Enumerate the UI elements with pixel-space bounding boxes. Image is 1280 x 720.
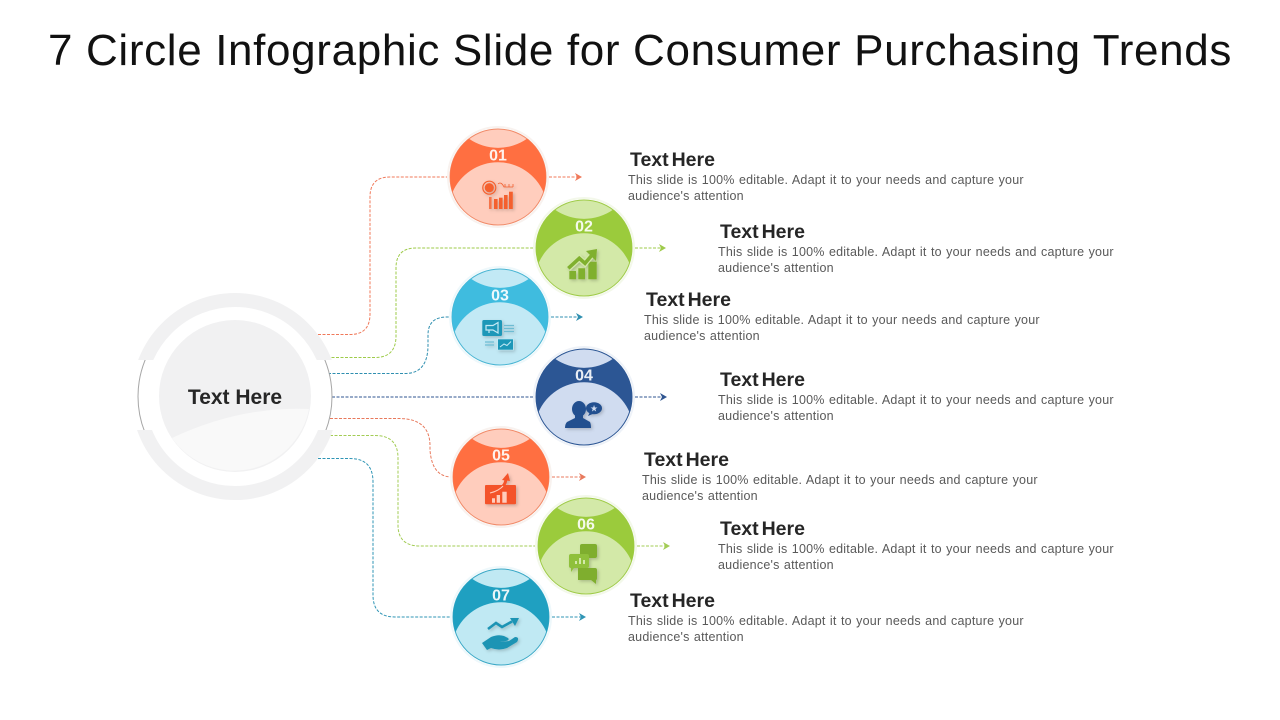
text block 01: audience's attention (628, 189, 744, 203)
icon: rising bars with arrow (568, 249, 597, 279)
text block 02: This slide is 100% editable. Adapt it to your needs and capture your (718, 245, 1114, 259)
title: 7 Circle Infographic Slide for Consumer Purchasing Trends (48, 26, 1232, 75)
text block 01 (628, 149, 1024, 203)
text block 01: Text Here (630, 149, 715, 171)
text block 05: audience's attention (642, 489, 758, 503)
text block 06: This slide is 100% editable. Adapt it to your needs and capture your (718, 542, 1114, 556)
icon: chat bubbles (569, 544, 597, 584)
text block 03 (644, 289, 1040, 343)
text block 03: audience's attention (644, 329, 760, 343)
connector: 01 (318, 173, 582, 334)
text block 04: Text Here (720, 369, 805, 391)
text block 07 (628, 590, 1024, 644)
circle 03 (450, 267, 550, 367)
text block 06 (718, 518, 1114, 572)
text block 07: Text Here (630, 590, 715, 612)
connector: 04 (332, 393, 667, 401)
text block 02: audience's attention (718, 261, 834, 275)
text block 03: Text Here (646, 289, 731, 311)
circle 07: 07 (492, 588, 510, 604)
central hub (138, 300, 332, 494)
text block 07: This slide is 100% editable. Adapt it to your needs and capture your (628, 614, 1024, 628)
text block 04: audience's attention (718, 409, 834, 423)
text block 02: Text Here (720, 221, 805, 243)
icon: megaphone and chart boards (482, 320, 514, 350)
circle 07 (451, 567, 551, 667)
hub label: Text Here (188, 386, 282, 409)
text block 05: Text Here (644, 449, 729, 471)
circle 02 (534, 198, 634, 298)
connector: 06 (330, 436, 670, 550)
connector: 03 (328, 313, 583, 374)
circle 05: 05 (492, 448, 510, 464)
text block 02 (718, 221, 1114, 275)
circle 04 (534, 347, 634, 447)
text block 07: audience's attention (628, 630, 744, 644)
text block 04: This slide is 100% editable. Adapt it to your needs and capture your (718, 393, 1114, 407)
text block 06: audience's attention (718, 558, 834, 572)
icon: presentation board with growth arrow (485, 473, 516, 504)
connector: 05 (330, 418, 586, 481)
text block 05: This slide is 100% editable. Adapt it to your needs and capture your (642, 473, 1038, 487)
connector: 07 (318, 458, 586, 621)
text block 01: This slide is 100% editable. Adapt it to your needs and capture your (628, 173, 1024, 187)
connector: 02 (327, 244, 666, 358)
circle 02: 02 (575, 218, 593, 236)
icon: person with speech bubble: ★ (590, 404, 598, 414)
circle 06: 06 (577, 516, 595, 534)
text block 05 (642, 449, 1038, 503)
circle 03: 03 (491, 288, 509, 304)
circle 04: 04 (575, 368, 593, 384)
circle 01: 01 (489, 148, 507, 164)
text block 06: Text Here (720, 518, 805, 540)
text block 04 (718, 369, 1114, 423)
circle 01 (448, 127, 548, 227)
icon: hand with rising arrow (482, 618, 519, 650)
icon: magnifier and bar chart (483, 181, 513, 209)
circle 05 (451, 427, 551, 527)
text block 03: This slide is 100% editable. Adapt it to your needs and capture your (644, 313, 1040, 327)
circle 06 (536, 496, 636, 596)
